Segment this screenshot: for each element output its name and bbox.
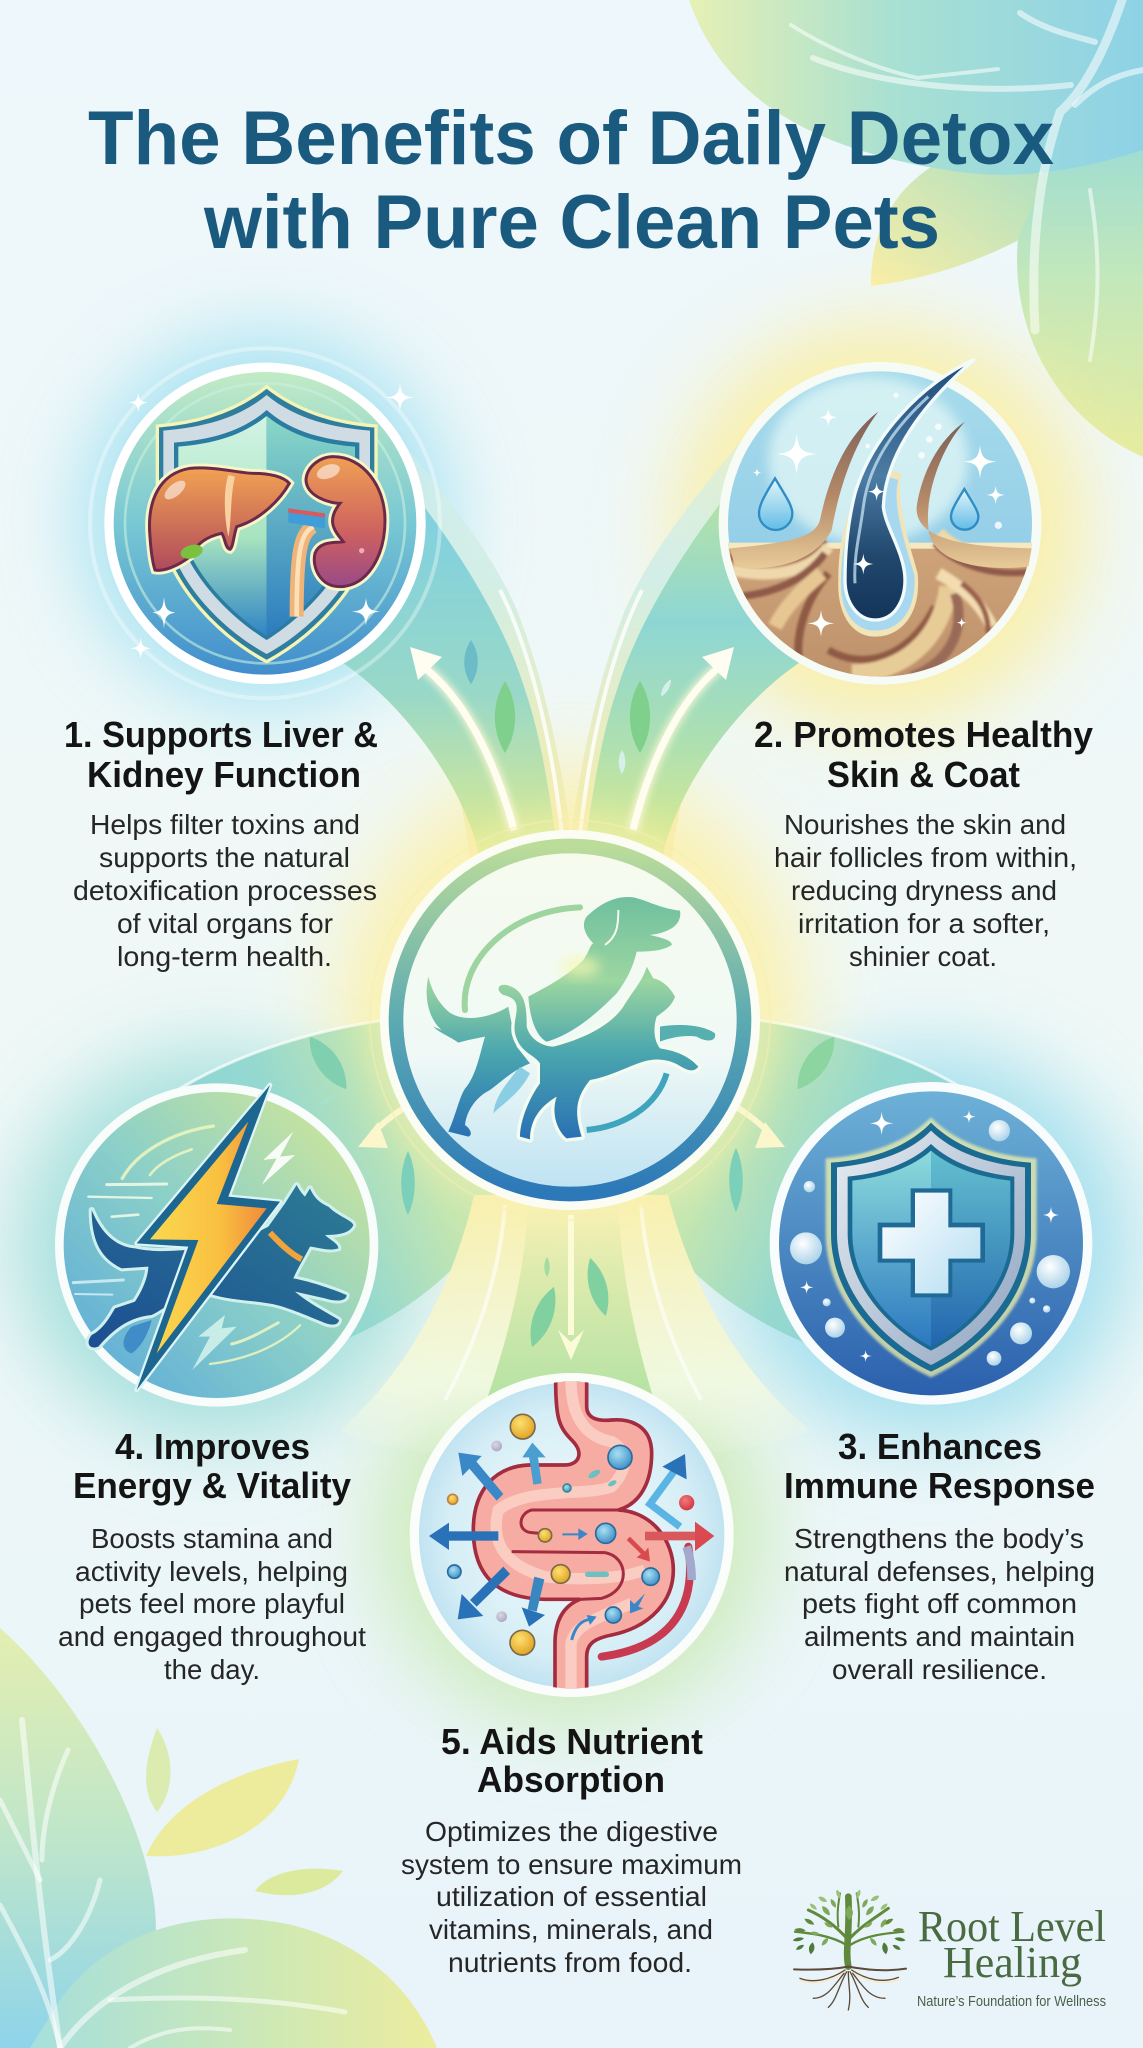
yellow halo around the center circle	[366, 815, 776, 1225]
benefit 4 text: pets feel more playful	[79, 1588, 345, 1619]
benefit 4 text: and engaged throughout	[58, 1621, 366, 1652]
benefit 1 text: of vital organs for	[117, 908, 333, 939]
benefit 4 text: Energy & Vitality	[73, 1465, 351, 1506]
benefit 3 text: pets fight off common	[802, 1588, 1077, 1619]
icon: dog and cat in center circle	[370, 820, 770, 1220]
benefit 2 text: reducing dryness and	[791, 875, 1057, 906]
arrow: to benefit 5	[558, 1215, 584, 1360]
benefit 2 text: Skin & Coat	[827, 754, 1020, 795]
benefit 2 text: hair follicles from within,	[774, 842, 1077, 873]
benefit 2 text: Nourishes the skin and	[784, 809, 1066, 840]
flow ribbon: center to benefit 3	[638, 1016, 978, 1350]
benefit 4 text: activity levels, helping	[75, 1556, 348, 1587]
benefit 1 text: supports the natural	[99, 842, 350, 873]
logo: Root Level Healing: Nature’s Foundation for Wellness	[917, 1993, 1106, 2010]
benefit 3 text: Strengthens the body’s	[794, 1523, 1084, 1554]
benefit 2 text: irritation for a softer,	[798, 908, 1050, 939]
benefit 3 text: 3. Enhances	[838, 1426, 1042, 1467]
benefit 1 text: long-term health.	[117, 941, 332, 972]
decorative leaves bottom left	[0, 1628, 437, 2048]
benefit 1 text: Kidney Function	[87, 754, 361, 795]
icon: digestive tract with nutrient arrows	[414, 1378, 729, 1692]
icon: lightning bolt and running dog	[59, 1085, 374, 1402]
icon: hair follicle	[715, 359, 1048, 710]
logo: Root Level Healing	[792, 1889, 1106, 2010]
title: The Benefits of Daily Detox	[88, 96, 1054, 181]
arrow: to benefit 1	[410, 647, 514, 830]
arrow: to benefit 2	[633, 647, 734, 830]
leaves on the flow ribbons	[301, 640, 843, 1350]
benefit 5 text: 5. Aids Nutrient	[441, 1721, 703, 1762]
icon: tree of life	[792, 1889, 906, 2010]
flow ribbon: center to benefit 5	[340, 1195, 810, 1460]
benefit 1 text: 1. Supports Liver &	[64, 714, 378, 755]
benefit 1 text: detoxification processes	[73, 875, 377, 906]
benefit 5 text: Optimizes the digestive	[425, 1816, 718, 1847]
decorative leaves top right	[689, 0, 1143, 457]
benefit 3 text: natural defenses, helping	[784, 1556, 1095, 1587]
icon: immune shield with cross	[774, 1087, 1088, 1400]
benefit 5 text	[401, 1721, 742, 1978]
benefit 3 text: Immune Response	[784, 1465, 1095, 1506]
arrow: to benefit 3	[722, 1098, 785, 1148]
benefit 2 text: 2. Promotes Healthy	[754, 714, 1093, 755]
benefit 1 text	[64, 714, 378, 972]
title	[88, 96, 1054, 265]
benefit 3 text: ailments and maintain	[804, 1621, 1075, 1652]
flow ribbon: center to benefit 1	[300, 440, 572, 860]
benefit 4 text: Boosts stamina and	[91, 1523, 333, 1554]
benefit 4 text: the day.	[164, 1654, 260, 1685]
benefit 5 text: nutrients from food.	[448, 1947, 692, 1978]
logo: Root Level Healing: Root Level	[918, 1902, 1106, 1951]
logo: Root Level Healing: Healing	[943, 1938, 1082, 1987]
benefit 5 text: vitamins, minerals, and	[429, 1914, 713, 1945]
benefit 4 text	[58, 1426, 366, 1685]
icon: shield with liver and kidney	[90, 348, 440, 698]
benefit 5 text: system to ensure maximum	[401, 1849, 742, 1880]
arrow: to benefit 4	[358, 1098, 420, 1148]
benefit 5 text: utilization of essential	[436, 1881, 707, 1912]
soft glows	[17, 325, 1130, 1725]
benefit 3 text: overall resilience.	[832, 1654, 1047, 1685]
benefit 2 text	[754, 714, 1093, 972]
benefit 5 text: Absorption	[477, 1759, 665, 1800]
flow ribbon: center to benefit 2	[570, 440, 842, 860]
benefit 1 text: Helps filter toxins and	[90, 809, 360, 840]
benefit 2 text: shinier coat.	[849, 941, 997, 972]
title: with Pure Clean Pets	[203, 180, 940, 265]
benefit 3 text	[784, 1426, 1095, 1685]
benefit 4 text: 4. Improves	[115, 1426, 310, 1467]
flow ribbon: center to benefit 4	[165, 1016, 505, 1350]
